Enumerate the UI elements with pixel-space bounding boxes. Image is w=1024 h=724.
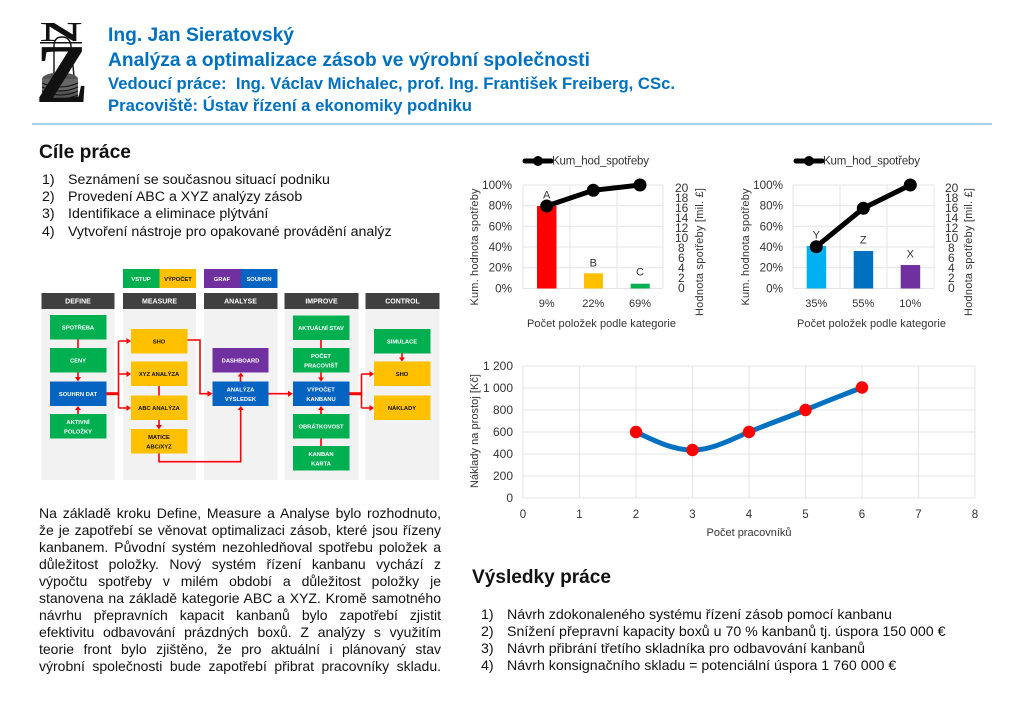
chart: XYZ analysis: 6 [948,251,955,265]
chart: XYZ analysis: 10 [945,231,959,245]
column: DEFINE: AKTIVNÍ [66,418,90,426]
chart: ABC analysis: 4 [678,261,685,275]
column: MEASURE: XYZ ANALÝZA [139,371,180,378]
chart: ABC analysis: 6 [678,251,685,265]
logo: NZ well: N [40,17,83,47]
header: author and thesis details: Vedoucí práce: Ing. Václav Michalec, prof. Ing. František Freiberg, CSc. [108,75,675,93]
logo: NZ well: Z [36,28,88,121]
paragraph: analysis summary: výpočtu spotřeby v milém období a důležitost položky je [39,573,441,589]
header: author and thesis details: Pracoviště: Ústav řízení a ekonomiky podniku [108,96,472,115]
column: ANALYSE: VÝSLEDEK [225,396,257,403]
column: IMPROVE: AKTUÁLNÍ STAV [298,324,344,332]
list: goals: Identifikace a eliminace plýtvání [68,206,268,222]
paragraph: analysis summary: stanovena na základě kategorie ABC a XYZ. Kromě samotného [39,590,441,606]
column: CONTROL: SIMULACE [387,340,417,346]
column: MEASURE: MEASURE [142,298,177,306]
column: IMPROVE: KARTA [311,462,332,468]
chart: ABC analysis: 20 [675,181,689,195]
chart: XYZ analysis: Počet položek podle kategorie [797,318,946,330]
legend: XYZ chart: Kum_hod_spotřeby [823,156,920,168]
legend: box colours: VSTUP [131,277,151,283]
list: goals: 2) [42,189,55,205]
bars: XYZ [807,246,920,288]
column: ANALYSE: ANALÝZA [227,386,255,394]
chart: XYZ analysis: X [907,248,915,260]
column: IMPROVE: KANBAN [308,452,334,458]
list: goals [42,172,392,240]
column: MEASURE: SHO [153,340,166,346]
heading: Výsledky práce: Výsledky práce [472,567,611,588]
chart: ABC analysis: 69% [629,298,651,310]
paragraph: analysis summary: Na základě kroku Define, Measure a Analyse bylo rozhodnuto, [39,505,441,521]
chart: cost of downtime vs workers: 8 [972,509,978,521]
chart: cost of downtime vs workers: 400 [493,447,513,461]
paragraph: analysis summary: výrobní společnosti bude zapotřebí přibrat pracovníky skladu. [39,658,441,674]
chart: ABC analysis: Kum. hodnota spotřeby [469,188,481,306]
chart: cost of downtime vs workers: 1 [576,509,583,521]
paragraph: analysis summary: návrhu přepravních kapacit kanbanů bylo zapotřebí zjistit [39,607,441,623]
chart: ABC analysis: 10 [675,231,689,245]
chart: cost of downtime vs workers: 1 200 [483,359,513,373]
chart: XYZ analysis: 0% [766,282,783,296]
list: goals: 3) [42,206,55,222]
chart: ABC analysis: 16 [675,201,689,215]
column: DEFINE: SOUHRN DAT [59,392,98,398]
chart: XYZ analysis: 35% [805,298,828,310]
chart: XYZ analysis [740,156,975,330]
header: author and thesis details: Analýza a optimalizace zásob ve výrobní společnosti [108,50,590,71]
legend: ABC chart: Kum_hod_spotřeby [552,156,649,168]
chart: cost of downtime vs workers: 1 000 [483,381,513,395]
list: results: Snížení přepravní kapacity boxů u 70 % kanbanů tj. úspora 150 000 € [507,624,946,640]
bars: ABC [537,206,650,288]
list: results: 1) [481,607,494,623]
list: goals: Provedení ABC a XYZ analýzy zásob [68,189,302,205]
column: CONTROL: NÁKLADY [388,405,416,412]
chart: cost of downtime vs workers: 2 [633,509,639,521]
paragraph: analysis summary: že je zapotřebí se věnovat optimalizaci zásob, které jsou řízeny [39,522,441,538]
chart: ABC analysis [469,156,706,330]
chart: XYZ analysis: Y [813,230,821,242]
chart: XYZ analysis: 40% [760,241,783,254]
column: IMPROVE: POČET [311,353,331,360]
legend: box colours: VÝPOČET [164,276,192,283]
paragraph: analysis summary: teorie front bylo zjištěno, že pro aktuální i plánovaný stav [39,641,441,657]
column: DEFINE [42,293,114,480]
legend: box colours [123,269,278,288]
chart: cost of downtime vs workers: 200 [493,469,513,483]
line: cost curve [636,388,862,450]
chart: ABC analysis: 9% [539,298,555,310]
column: CONTROL: CONTROL [385,298,421,306]
column: DEFINE: CENY [70,358,86,364]
column: MEASURE: MATICE [148,435,170,441]
chart: ABC analysis: Hodnota spotřeby [mil. £] [694,188,706,316]
chart: XYZ analysis: 100% [753,179,783,192]
column: IMPROVE: OBRÁTKOVOST [298,424,344,430]
line: cumulative ABC [540,178,646,212]
markers: cost points [630,381,868,456]
paragraph: analysis summary: efektivitu odbavování prázdných boxů. Z analýzy s využitím [39,624,441,640]
chart: ABC analysis: 22% [582,298,605,310]
column: ANALYSE: ANALYSE [224,298,257,306]
legend: box colours: SOUHRN [246,277,272,283]
chart: ABC analysis: 80% [489,200,512,213]
chart: XYZ analysis: 20% [760,262,783,275]
chart: cost of downtime vs workers: 7 [915,509,922,521]
column: MEASURE: ABC ANALÝZA [138,405,181,412]
chart: ABC analysis: 0 [678,281,685,295]
list: results: Návrh přibrání třetího skladníka pro odbavování kanbanů [507,641,865,657]
paragraph: analysis summary: kanbanem. Původní systém nezohledňoval spotřebu položek a [39,539,441,555]
column: CONTROL: SHO [396,372,409,378]
column: IMPROVE: IMPROVE [305,298,338,306]
column: IMPROVE: KANBANU [306,397,336,403]
chart: cost of downtime vs workers: 5 [802,509,809,521]
chart: ABC analysis: 2 [678,271,685,285]
list: goals: 4) [42,224,55,240]
arrows: process connections [75,338,405,462]
chart: cost of downtime vs workers: 600 [493,425,513,439]
list: goals: 1) [42,172,55,188]
list: results: 4) [481,658,494,674]
legend: box colours: GRAF [214,277,231,283]
column: MEASURE: ABC/XYZ [146,444,172,450]
chart: XYZ analysis: 18 [945,191,959,205]
paragraph: analysis summary [39,505,442,674]
column: ANALYSE: DASHBOARD [222,358,259,364]
chart: XYZ analysis: 80% [760,200,783,213]
chart: XYZ analysis: 55% [852,298,875,310]
chart: cost of downtime vs workers: 3 [689,509,696,521]
list: goals: Vytvoření nástroje pro opakované provádění analýz [68,224,392,240]
chart: cost of downtime vs workers: 6 [859,509,865,521]
chart: ABC analysis: 60% [489,220,512,233]
line: cumulative XYZ [810,178,917,253]
chart: ABC analysis: 40% [489,241,512,254]
chart: XYZ analysis: Z [860,234,867,246]
column: ANALYSE [204,293,278,480]
column: IMPROVE: VÝPOČET [307,386,335,394]
column: IMPROVE [284,293,358,480]
header: author and thesis details [108,25,675,115]
paragraph: analysis summary: důležitost položky. Nový systém řízení kanbanu vychází z [39,556,441,572]
chart: XYZ analysis: 8 [948,241,955,255]
chart: XYZ analysis: 16 [945,201,959,215]
list: goals: Seznámení se současnou situací podniku [68,172,330,188]
column: DEFINE: DEFINE [65,298,91,306]
chart: cost of downtime vs workers: 0 [506,491,513,505]
chart: XYZ analysis: 4 [948,261,955,275]
chart: XYZ analysis: 60% [760,220,783,233]
list: results [481,607,946,674]
chart: cost of downtime vs workers: 800 [493,403,513,417]
column: IMPROVE: PRACOVIŠŤ [304,362,338,370]
chart: ABC analysis: 18 [675,191,689,205]
chart: cost of downtime vs workers: 0 [520,509,526,521]
chart: XYZ analysis: Hodnota spotřeby [mil. £] [963,188,975,316]
column: CONTROL [366,293,440,480]
column: MEASURE [123,293,196,480]
chart: ABC analysis: Počet položek podle kategorie [527,318,676,330]
chart: XYZ analysis: 10% [899,298,922,310]
list: results: 3) [481,641,494,657]
chart: ABC analysis: 12 [675,221,689,235]
chart: cost of downtime vs workers: Náklady na prostoj [Kč] [469,374,481,488]
chart: XYZ analysis: 14 [945,211,959,225]
list: results: Návrh zdokonaleného systému řízení zásob pomocí kanbanu [507,607,892,623]
chart: XYZ analysis: Kum. hodnota spotřeby [740,188,752,306]
list: results: 2) [481,624,494,640]
chart: cost of downtime vs workers: 4 [746,509,753,521]
column: DEFINE: POLOŽKY [64,428,92,436]
chart: ABC analysis: 0% [495,282,512,296]
chart: ABC analysis: 8 [678,241,685,255]
chart: ABC analysis: C [636,266,644,278]
chart: cost of downtime vs workers: Počet pracovníků [706,527,792,539]
header: author and thesis details: Ing. Jan Sieratovský [108,25,294,46]
flow diagram: DMAIC [42,269,440,480]
column: DEFINE: SPOTŘEBA [62,324,95,332]
chart: ABC analysis: 14 [675,211,689,225]
list: results: Návrh konsignačního skladu = potenciální úspora 1 760 000 € [507,658,896,674]
heading: Cíle práce: Cíle práce [39,142,131,163]
chart: ABC analysis: B [590,258,597,270]
chart: XYZ analysis: 12 [945,221,959,235]
chart: cost of downtime vs workers [469,359,978,539]
chart: ABC analysis: 100% [482,179,512,192]
chart: XYZ analysis: 2 [948,271,955,285]
chart: XYZ analysis: 0 [948,281,955,295]
chart: ABC analysis: A [543,190,551,202]
chart: ABC analysis: 20% [489,262,512,275]
chart: XYZ analysis: 20 [945,181,959,195]
